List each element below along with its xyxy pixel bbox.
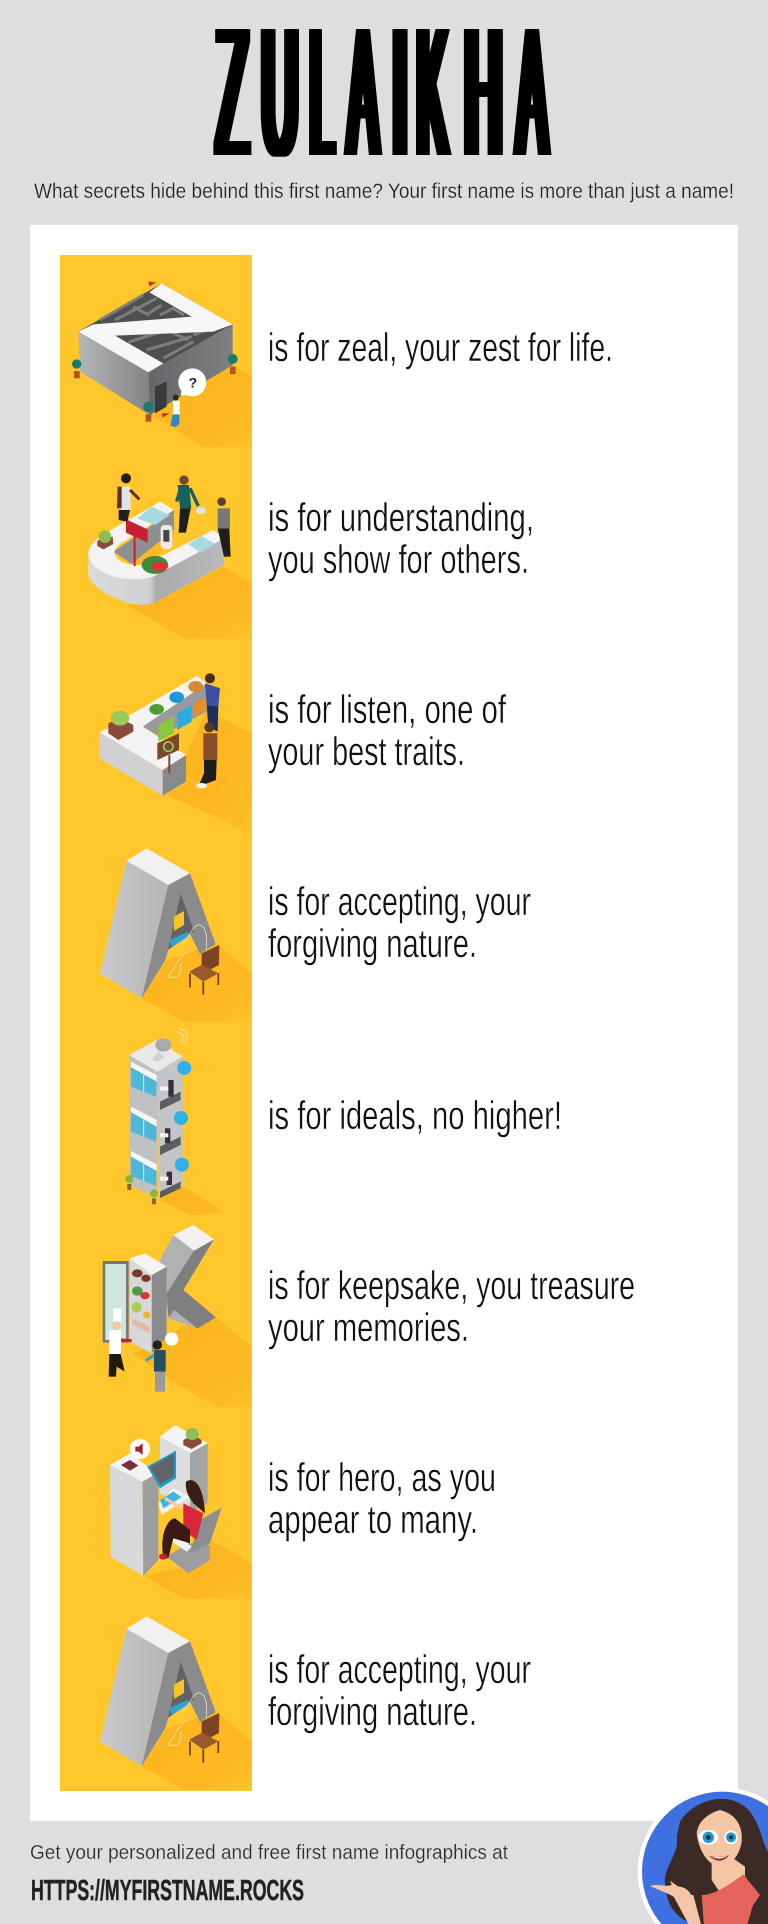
text: A line: is for accepting, your: [268, 880, 531, 924]
footer url: HTTPS://MYFIRSTNAME.ROCKS: [31, 1875, 304, 1907]
icon: letter Z maze: [72, 282, 252, 447]
icon: letter H desk: [110, 1425, 252, 1598]
text: U line: is for understanding,: [268, 496, 534, 540]
text: H line: [268, 1456, 496, 1542]
text: K line: is for keepsake, you treasure: [268, 1264, 635, 1308]
avatar badge: [638, 1787, 768, 1924]
text: L line: your best traits.: [268, 730, 465, 774]
text: L line: is for listen, one of: [268, 688, 507, 732]
icon: letter A first: [100, 848, 252, 1022]
text: A line: [268, 880, 531, 966]
icon: letter Z maze: ?: [189, 375, 197, 391]
white content panel: [30, 225, 738, 1821]
text: K line: [268, 1264, 635, 1350]
text: U line: [268, 496, 534, 582]
icon: letter K fridge: [103, 1225, 252, 1407]
text: L line: [268, 688, 507, 774]
icon: letter U counter: [88, 473, 252, 638]
text: second A line: [268, 1648, 531, 1734]
illustration column: [60, 255, 252, 1791]
footer call to action: Get your personalized and free first name infographics at: [30, 1841, 508, 1864]
icon: letter I building: [125, 1028, 227, 1215]
text: I line: is for ideals, no higher!: [268, 1094, 562, 1138]
text: A line: forgiving nature.: [268, 922, 477, 966]
text: second A line: is for accepting, your: [268, 1648, 531, 1692]
text: Z line: is for zeal, your zest for life.: [268, 326, 613, 370]
icon: letter L recycling counter: [99, 673, 252, 837]
text: K line: your memories.: [268, 1306, 469, 1350]
text: H line: is for hero, as you: [268, 1456, 496, 1500]
text: second A line: forgiving nature.: [268, 1690, 477, 1734]
text: H line: appear to many.: [268, 1498, 478, 1542]
icon: letter A second: [100, 1616, 252, 1790]
title: [213, 0, 552, 194]
text: U line: you show for others.: [268, 538, 529, 582]
